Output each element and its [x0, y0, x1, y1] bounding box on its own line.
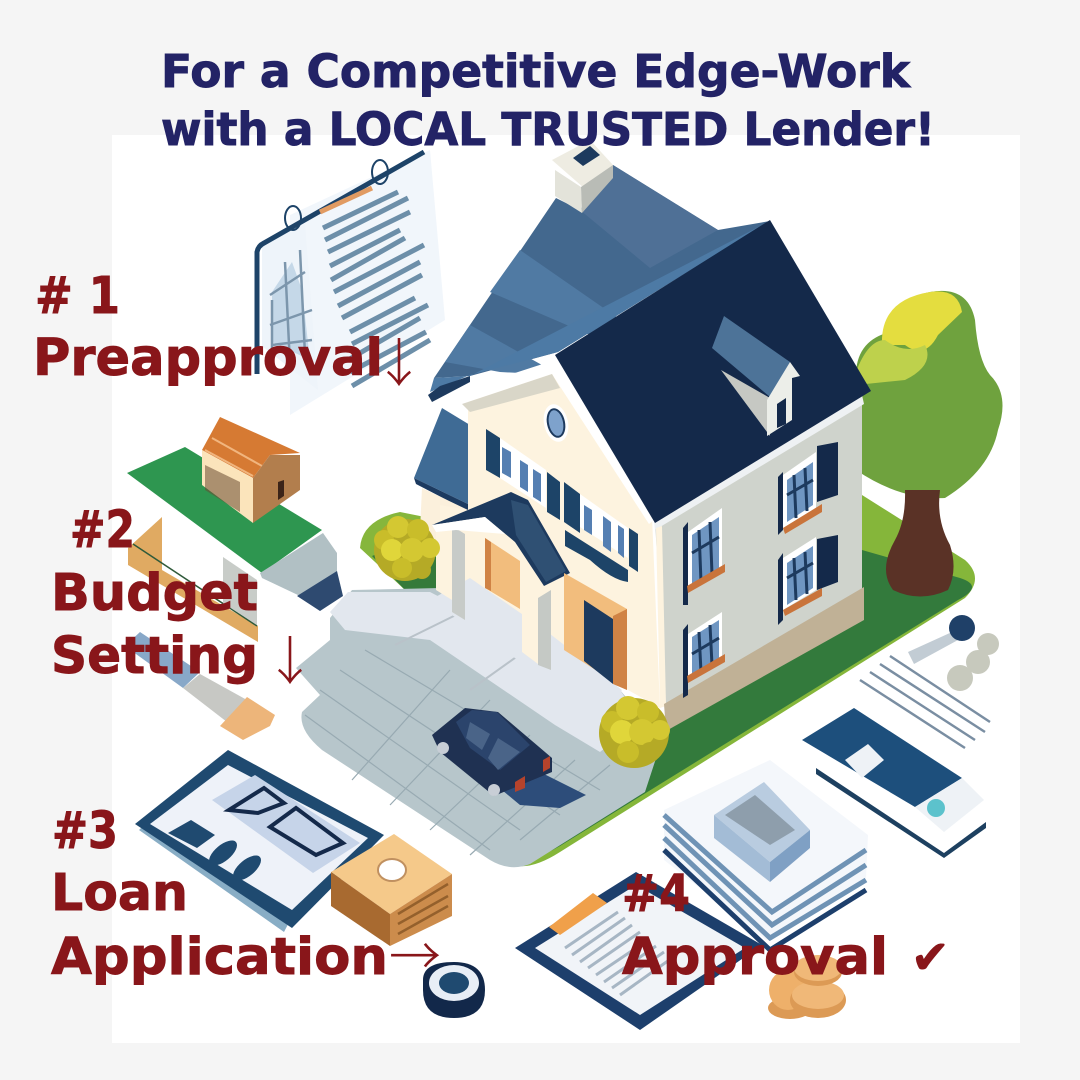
upper front windows — [486, 429, 638, 582]
chimney — [552, 140, 613, 213]
bushes — [374, 516, 670, 768]
step 3 label: Loan Application: Loan — [51, 864, 188, 923]
right grey wall — [655, 400, 862, 706]
step 3 label: Loan Application: #3 — [52, 802, 118, 861]
car — [432, 708, 586, 808]
title — [161, 45, 935, 156]
dormer — [712, 316, 800, 436]
step 4 label: Approval: #4 — [622, 865, 690, 924]
icon: loan application tablet — [135, 750, 384, 932]
step 4 label: Approval — [622, 865, 950, 987]
right wall windows — [683, 442, 838, 698]
step 2 label: Budget Setting — [51, 501, 316, 695]
front cream wall — [440, 366, 660, 708]
icon: stack of documents — [664, 760, 868, 950]
house — [414, 140, 871, 731]
step 1 label: Preapproval: Preapproval — [33, 329, 383, 388]
ground: lawn and driveway — [296, 495, 975, 867]
title: For a Competitive Edge-Work — [161, 45, 911, 98]
tree — [856, 291, 1002, 596]
step 1 label: Preapproval: # 1 — [35, 267, 120, 326]
step 2 label: Budget Setting: Budget — [51, 564, 258, 623]
round attic window — [540, 402, 572, 444]
main dark roof — [555, 220, 871, 523]
icon: gold coins — [768, 955, 846, 1019]
back roof — [434, 165, 770, 378]
icon: small wooden house on green plot — [127, 417, 343, 642]
step 3 label: Loan Application: Application — [51, 928, 388, 987]
base — [664, 587, 864, 731]
icon: clipboard with building plan — [257, 150, 445, 415]
step 3 label: Loan Application: → — [389, 915, 441, 990]
step 2 label: Budget Setting: #2 — [70, 501, 135, 560]
porch and front doors — [430, 492, 627, 716]
icon: wooden box — [331, 834, 452, 946]
step 4 label: Approval: ✔ — [911, 930, 950, 984]
white panel — [112, 135, 1020, 1043]
title: with a LOCAL TRUSTED Lender! — [161, 103, 935, 156]
side porch roof — [414, 408, 470, 505]
icon: coin token — [423, 962, 485, 1018]
step 1 label: Preapproval: ↓ — [373, 322, 425, 397]
step 3 label: Loan Application — [51, 802, 441, 990]
icon: contract document with keys and coins — [802, 615, 999, 858]
step 4 label: Approval: Approval — [622, 928, 888, 987]
step 2 label: Budget Setting: ↓ — [264, 620, 316, 695]
step 1 label: Preapproval — [33, 267, 425, 397]
icon: approval clipboard — [515, 872, 762, 1030]
step 2 label: Budget Setting: Setting — [51, 627, 258, 686]
icon: key and usb drive — [125, 632, 275, 740]
